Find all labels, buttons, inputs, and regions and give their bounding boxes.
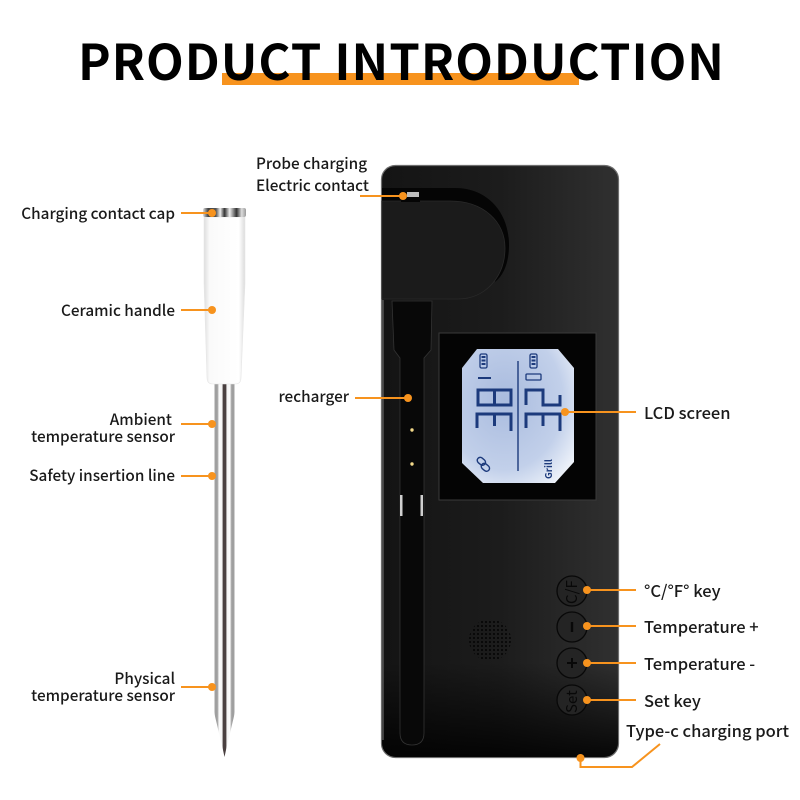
callout: recharger: [278, 385, 412, 407]
callout: temperature minus: Temperature -: [644, 651, 755, 675]
callout: probe charging electric contact: [256, 152, 407, 200]
Grill label: Grill: [541, 459, 555, 479]
plus key: [557, 648, 587, 678]
callout: probe charging electric contact: Electric contact: [256, 174, 369, 196]
ceramic handle: [204, 217, 245, 384]
LCD divider: [517, 361, 519, 471]
callout: set key: Set key: [644, 688, 701, 712]
callout: C/F key: °C/°F° key: [644, 578, 721, 602]
left edge highlight: [382, 300, 384, 740]
callout: ambient temperature sensor: temperature sensor: [31, 425, 176, 447]
callout: ceramic handle: Ceramic handle: [61, 299, 175, 321]
callout: set key: [583, 688, 701, 712]
callout: type-c charging port: [576, 718, 790, 767]
callout: physical temperature sensor: temperature sensor: [31, 684, 176, 706]
probe charging cradle: [382, 188, 509, 282]
panel: temperature probe: [203, 208, 246, 757]
callout: ambient temperature sensor: [31, 408, 216, 447]
callout: physical temperature sensor: [31, 667, 216, 706]
title: PRODUCT INTRODUCTION: [78, 24, 724, 95]
probe shaft: [214, 380, 235, 757]
charging contact: [401, 192, 420, 202]
LCD digits: [477, 390, 560, 431]
Set key: Set: [561, 690, 582, 713]
callout: safety insertion line: Safety insertion line: [29, 464, 175, 486]
callout: recharger: recharger: [278, 385, 350, 407]
battery icons: [480, 354, 541, 380]
callout: LCD screen: [561, 400, 731, 424]
callout: LCD screen: LCD screen: [644, 400, 731, 424]
callout: C/F key: [583, 578, 721, 602]
panel: charger device: [382, 166, 618, 758]
callout: temperature minus: [583, 651, 755, 675]
link icon: [476, 456, 491, 473]
charging cap: [203, 208, 246, 217]
speaker grille: [469, 619, 511, 661]
control buttons: [557, 576, 587, 715]
callout: charging contact cap: Charging contact cap: [21, 202, 175, 224]
callout: physical temperature sensor: Physical: [114, 667, 175, 689]
probe slot: [392, 301, 432, 745]
callout: probe charging electric contact: Probe charging: [256, 152, 367, 174]
callout: ambient temperature sensor: Ambient: [110, 408, 172, 430]
callout: temperature plus: Temperature +: [644, 614, 759, 638]
callout: type-c charging port: Type-c charging port: [626, 718, 790, 742]
device body: [382, 166, 618, 758]
LCD screen: [439, 333, 596, 500]
recharger pins: [400, 428, 423, 516]
minus key: [557, 612, 587, 642]
C/F key: C/F: [561, 580, 582, 604]
callout: temperature plus: [583, 614, 759, 638]
